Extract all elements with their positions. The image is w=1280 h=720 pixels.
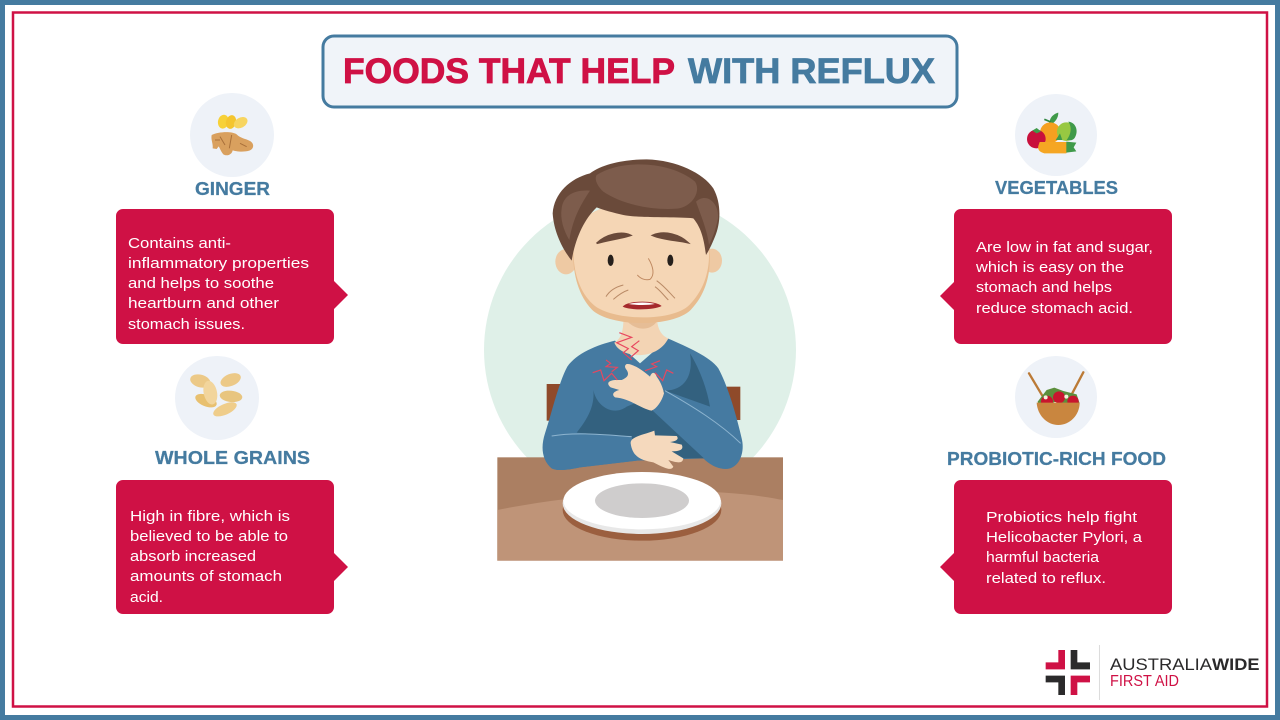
logo bbox=[1046, 645, 1260, 700]
illustration: man with heartburn at table bbox=[484, 159, 796, 561]
pain marks bbox=[593, 333, 673, 381]
icon: salad bowl bbox=[1015, 356, 1097, 438]
hair bbox=[553, 159, 719, 261]
callout: vegetables bbox=[940, 209, 1172, 344]
title: WITH REFLUX bbox=[688, 52, 936, 91]
heading: vegetables: VEGETABLES bbox=[995, 177, 1118, 198]
callout: ginger bbox=[116, 209, 348, 344]
logo: AUSTRALIA bbox=[1110, 655, 1213, 674]
logo: WIDE bbox=[1212, 655, 1260, 674]
callout: probiotic-rich food: harmful bacteria bbox=[986, 549, 1100, 566]
neck bbox=[614, 313, 668, 355]
panel: vegetables bbox=[940, 94, 1172, 344]
logo: FIRST AID bbox=[1110, 673, 1179, 690]
heading: ginger: GINGER bbox=[195, 178, 270, 199]
callout: vegetables: stomach and helps bbox=[976, 279, 1112, 296]
heading: probiotic-rich food: PROBIOTIC-RICH FOOD bbox=[947, 448, 1166, 469]
callout: ginger: Contains anti- bbox=[128, 235, 231, 252]
face bbox=[597, 233, 688, 243]
callout: probiotic-rich food: Probiotics help fight bbox=[986, 509, 1138, 526]
hands bbox=[608, 364, 664, 411]
panel: probiotic-rich food bbox=[940, 356, 1172, 614]
callout: ginger: heartburn and other bbox=[128, 295, 279, 312]
callout: ginger: stomach issues. bbox=[128, 316, 245, 333]
title: FOODS THAT HELP bbox=[343, 52, 675, 91]
icon: grains bbox=[175, 356, 259, 440]
callout: whole grains bbox=[116, 480, 348, 614]
icon: ginger bbox=[190, 93, 274, 177]
callout: ginger: and helps to soothe bbox=[128, 275, 274, 292]
callout: whole grains: amounts of stomach bbox=[130, 568, 282, 585]
panel: whole grains bbox=[116, 356, 348, 614]
callout: whole grains: absorb increased bbox=[130, 548, 256, 565]
callout: vegetables: Are low in fat and sugar, bbox=[976, 239, 1153, 256]
ears bbox=[555, 249, 577, 274]
callout: whole grains: believed to be able to bbox=[130, 528, 288, 545]
icon: vegetables bbox=[1015, 94, 1097, 176]
callout: ginger: inflammatory properties bbox=[128, 255, 309, 272]
sweater bbox=[543, 339, 743, 470]
head bbox=[573, 202, 710, 323]
logo mark bbox=[1046, 645, 1100, 700]
title bbox=[323, 36, 957, 107]
plate bbox=[563, 479, 721, 541]
right forearm bbox=[653, 391, 742, 469]
callout: vegetables: reduce stomach acid. bbox=[976, 300, 1133, 317]
callout: probiotic-rich food bbox=[940, 480, 1172, 614]
callout: whole grains: acid. bbox=[130, 589, 163, 606]
heading: whole grains: WHOLE GRAINS bbox=[155, 447, 310, 468]
callout: vegetables: which is easy on the bbox=[975, 259, 1124, 276]
callout: whole grains: High in fibre, which is bbox=[130, 508, 290, 525]
left forearm bbox=[544, 434, 637, 470]
callout: probiotic-rich food: Helicobacter Pylori, a bbox=[986, 529, 1143, 546]
callout: probiotic-rich food: related to reflux. bbox=[986, 570, 1106, 587]
panel: ginger bbox=[116, 93, 348, 344]
